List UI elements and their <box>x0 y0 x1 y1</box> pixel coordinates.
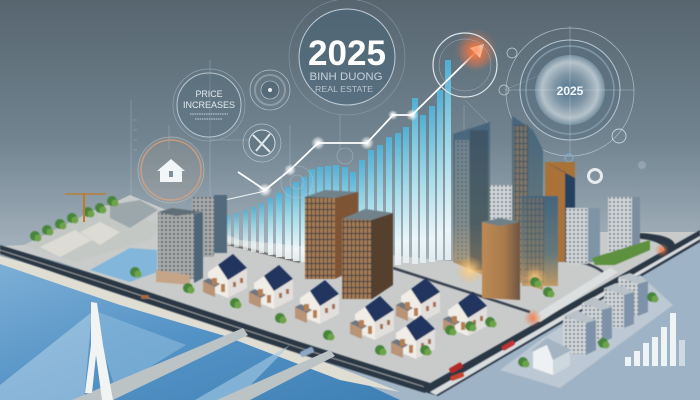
circle: 2025 Binh Duong real estate: REAL ESTATE <box>315 85 373 94</box>
cable-stayed bridge <box>0 302 335 400</box>
circle: price increases <box>173 69 245 141</box>
circle: price increases: PRICE <box>196 89 222 99</box>
small ring icons <box>499 48 646 182</box>
garden shrubs <box>130 267 554 356</box>
bar chart: price growth <box>226 60 451 266</box>
crane <box>65 193 106 222</box>
houses <box>203 254 487 359</box>
lower right platform <box>500 275 673 388</box>
upper waterfront pool <box>90 248 157 282</box>
buildings and streets layer <box>130 116 673 388</box>
shoreline <box>0 256 400 392</box>
ground plaza <box>0 195 700 390</box>
circle: 2025 radar dial: 2025 <box>557 84 584 98</box>
right ground <box>430 240 700 400</box>
icon: target dial <box>250 70 290 110</box>
center bronze towers <box>305 190 393 299</box>
circle: price increases: INCREASES <box>183 100 235 110</box>
road lights and cars <box>141 243 669 381</box>
construction site <box>24 196 160 262</box>
left apartment towers <box>156 195 227 285</box>
circle: 2025 Binh Duong real estate: 2025 <box>308 34 386 73</box>
circle: arrow target ring <box>433 28 498 97</box>
thin construction lines <box>131 60 540 200</box>
circle: 2025 Binh Duong real estate: BINH DUONG <box>310 71 382 83</box>
icon: faint globe <box>281 148 353 198</box>
rising trend arrow <box>225 34 494 200</box>
right skyline towers <box>453 116 650 300</box>
water <box>0 258 400 400</box>
icon: tools <box>243 124 281 162</box>
circle: 2025 radar dial <box>506 26 634 156</box>
small white house <box>518 338 572 375</box>
road <box>0 230 700 396</box>
icon: house in orange ring <box>137 136 205 204</box>
lower right apartment row <box>563 273 658 355</box>
soft scene layer <box>0 196 700 396</box>
mini bar chart <box>625 313 685 366</box>
circle: 2025 Binh Duong real estate <box>289 0 405 115</box>
